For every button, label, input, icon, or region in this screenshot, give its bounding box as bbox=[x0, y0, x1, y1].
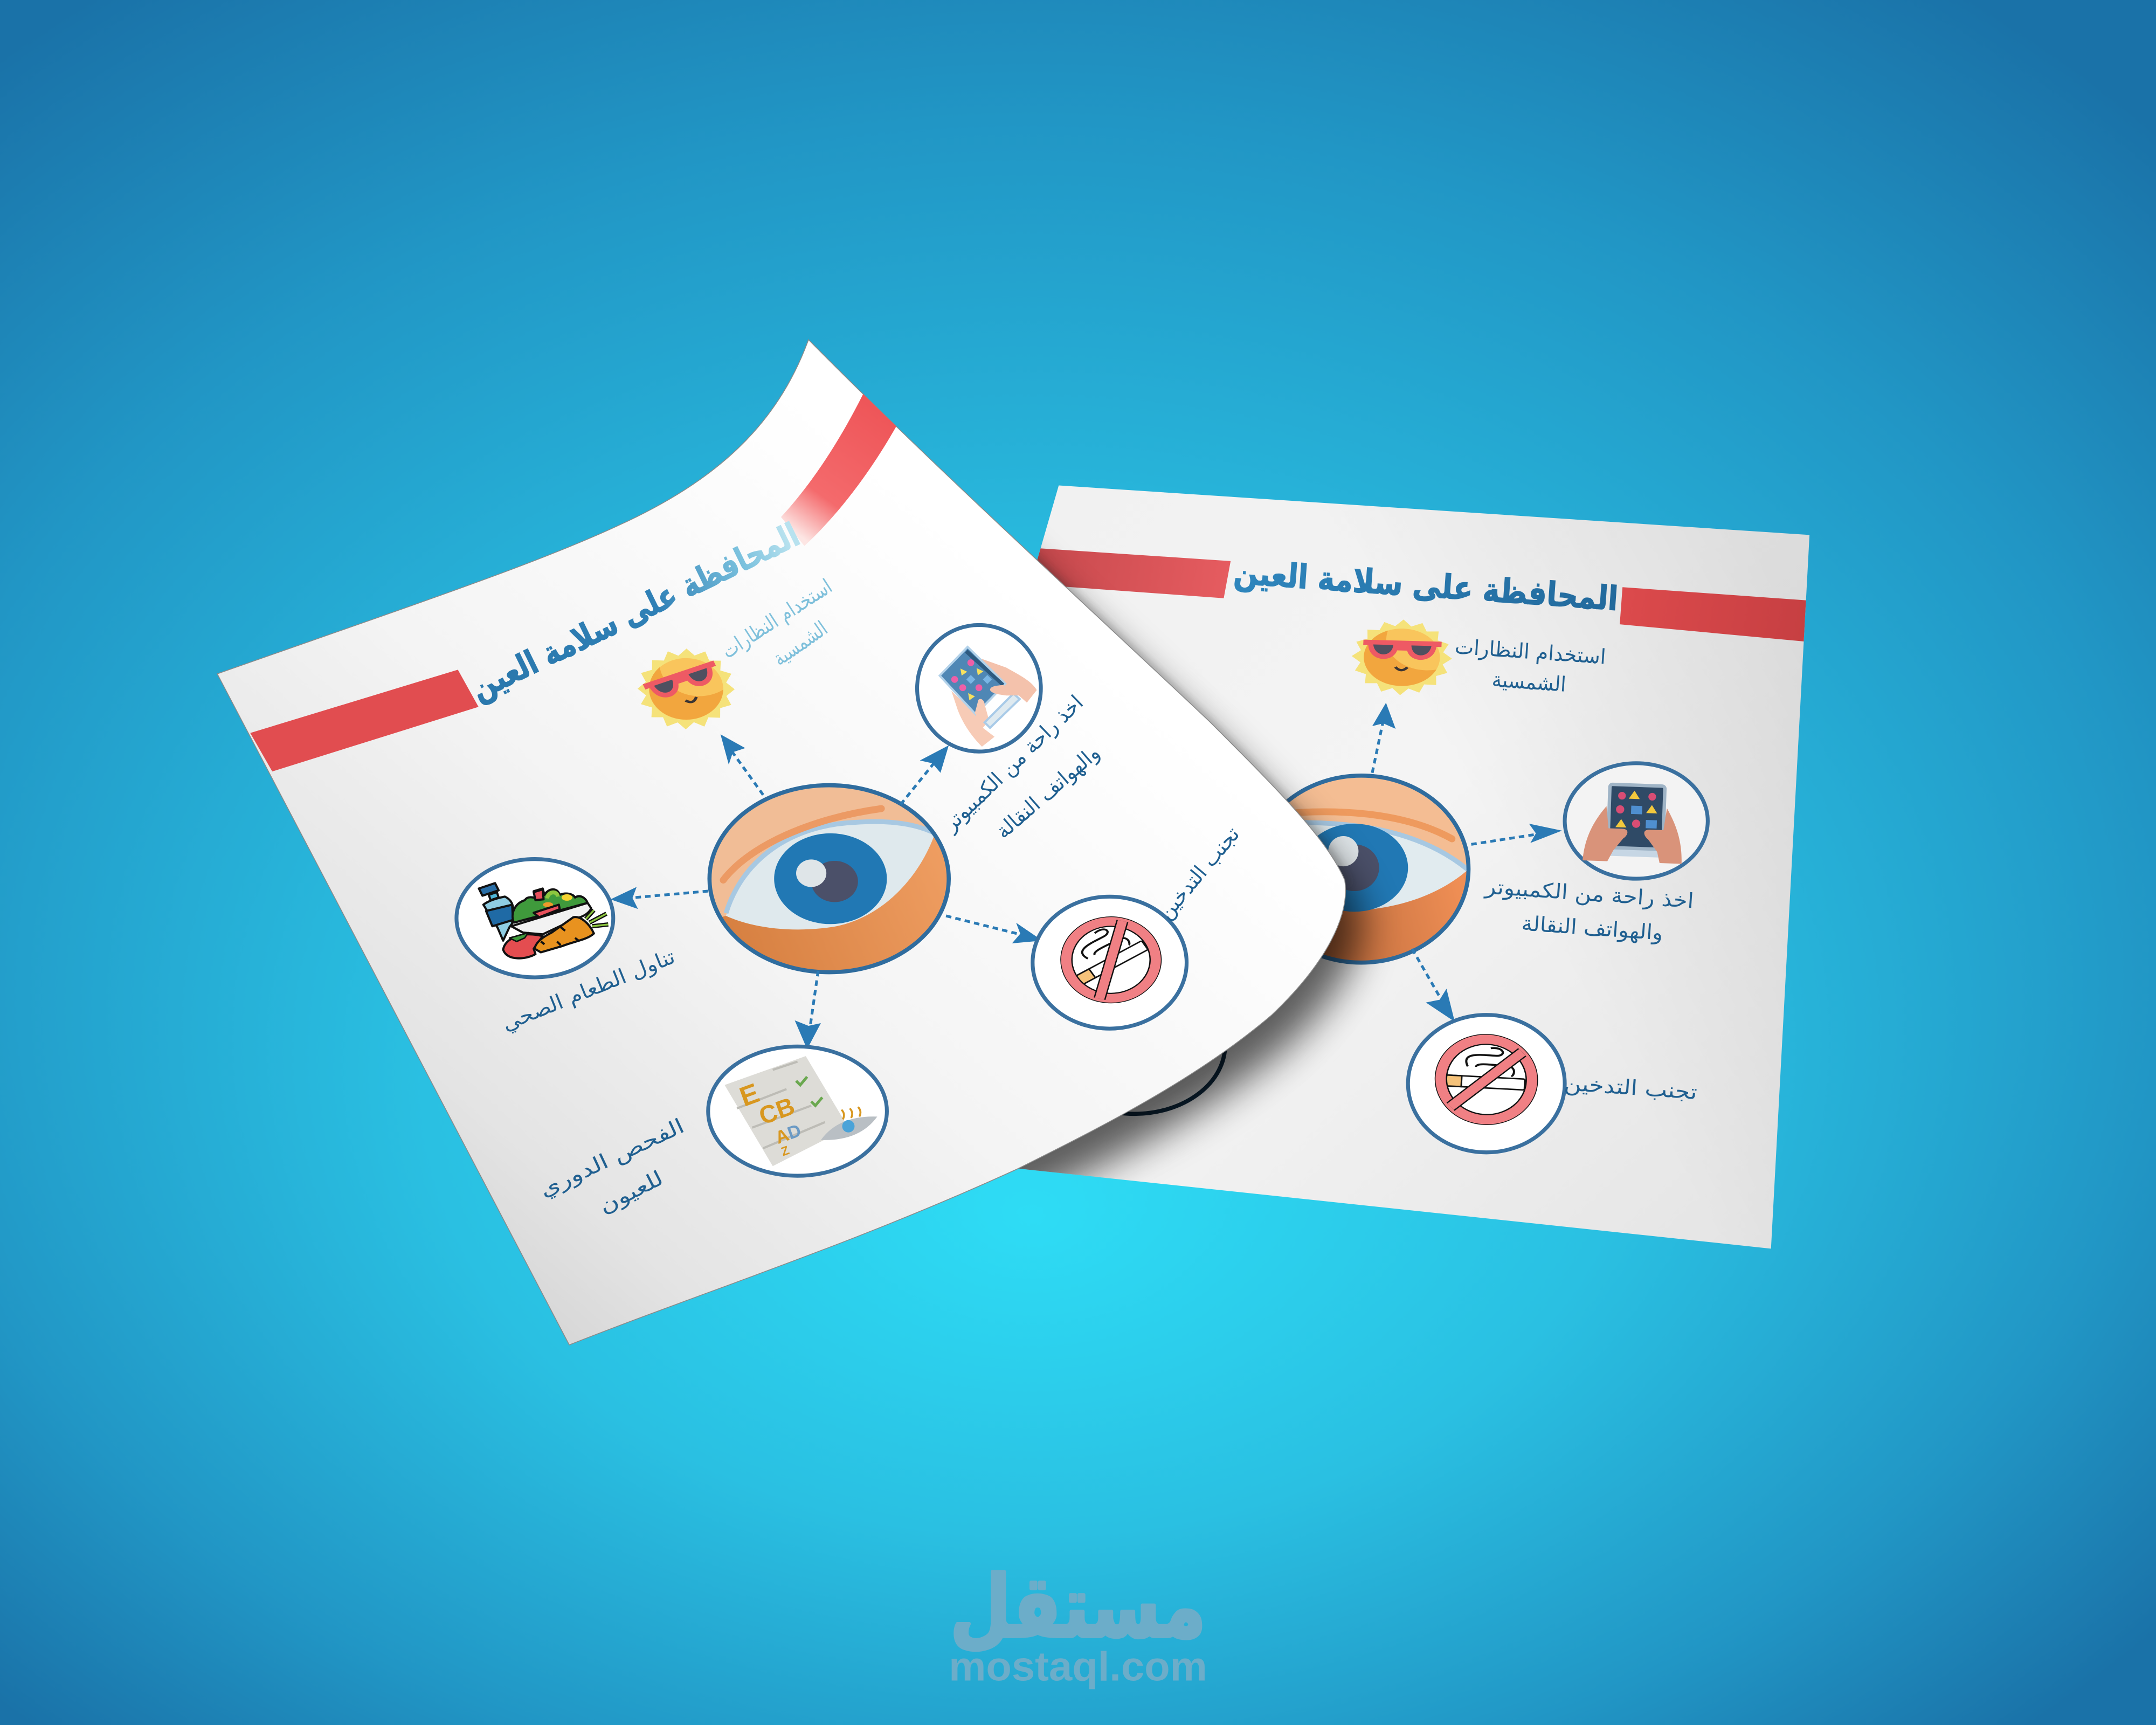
icon: tablet circle bbox=[917, 625, 1041, 751]
label: sunglasses: الشمسية bbox=[769, 616, 832, 671]
icon: no smoking circle bbox=[1033, 896, 1187, 1029]
label: computer break: والهواتف النقالة bbox=[991, 741, 1104, 844]
icon: eye exam circle bbox=[708, 1046, 887, 1176]
label: eye exam: للعيون bbox=[595, 1166, 667, 1219]
tomato bbox=[503, 933, 543, 958]
curl shadow bbox=[234, 344, 1362, 1375]
label: no smoking: تجنب التدخين bbox=[1153, 822, 1245, 924]
panel: back sheet bbox=[1019, 485, 1810, 1248]
arrow right bbox=[1471, 824, 1562, 844]
arrow to food bbox=[611, 887, 708, 909]
exam eye bbox=[821, 1116, 877, 1140]
arrow to exam bbox=[794, 971, 821, 1049]
red bar top, curled bbox=[781, 394, 898, 546]
title: المحافظة على سلامة العين bbox=[1233, 553, 1619, 618]
panel: front curled sheet bbox=[217, 340, 1345, 1345]
label: computer break: والهواتف النقالة bbox=[1521, 912, 1664, 946]
label: eye exam bbox=[536, 1114, 688, 1219]
exam chart bbox=[724, 1056, 848, 1166]
watermark logo bbox=[949, 1558, 1207, 1689]
watermark logo: مستقل bbox=[950, 1558, 1206, 1657]
icon: sunglasses sun bbox=[1350, 618, 1454, 696]
label: sunglasses bbox=[717, 574, 837, 671]
salad bowl bbox=[511, 888, 591, 934]
label: no smoking: تجنب التدخين bbox=[1563, 1071, 1698, 1105]
label: sunglasses bbox=[1454, 634, 1607, 697]
icon: healthy food circle bbox=[457, 859, 613, 977]
icon: eye bbox=[1245, 776, 1485, 976]
title: المحافظة على سلامة العين bbox=[465, 516, 805, 708]
arrow down bbox=[1412, 949, 1455, 1022]
icon: no smoking circle bbox=[1408, 1015, 1565, 1153]
label: computer break: اخذ راحة من الكمبيوتر bbox=[938, 691, 1088, 837]
icon: eye exam circle: Z bbox=[779, 1143, 791, 1158]
hidden circle under curl bbox=[1044, 976, 1225, 1114]
icon: eye exam circle: E bbox=[736, 1077, 763, 1113]
arrow to tablet bbox=[901, 746, 949, 804]
label: eye exam: الفحص الدوري bbox=[536, 1114, 688, 1202]
arrow to sun bbox=[721, 734, 763, 795]
label: computer break: اخذ راحة من الكمبيوتر bbox=[1483, 874, 1695, 913]
arrow up bbox=[1372, 703, 1395, 773]
carrot bbox=[535, 910, 609, 953]
arrow to no smoking bbox=[946, 916, 1042, 943]
icon: eye bbox=[694, 785, 963, 990]
label: sunglasses: الشمسية bbox=[1491, 667, 1567, 697]
label: computer break bbox=[1483, 874, 1695, 946]
red bar left bbox=[250, 670, 479, 771]
label: sunglasses: استخدام النظارات bbox=[1454, 634, 1607, 670]
label: sunglasses: استخدام النظارات bbox=[717, 574, 837, 664]
icon: eye exam circle: CB bbox=[755, 1092, 798, 1130]
icon: sunglasses sun bbox=[623, 636, 750, 742]
icon: eye exam circle: AD bbox=[773, 1121, 804, 1148]
red bar left bbox=[1037, 548, 1231, 598]
red bar right bbox=[1620, 587, 1815, 642]
label: healthy food: تناول الطعام الصحي bbox=[499, 944, 679, 1036]
bottle bbox=[479, 883, 513, 941]
icon: tablet circle bbox=[1565, 763, 1708, 879]
watermark logo: mostaql.com bbox=[949, 1644, 1207, 1689]
